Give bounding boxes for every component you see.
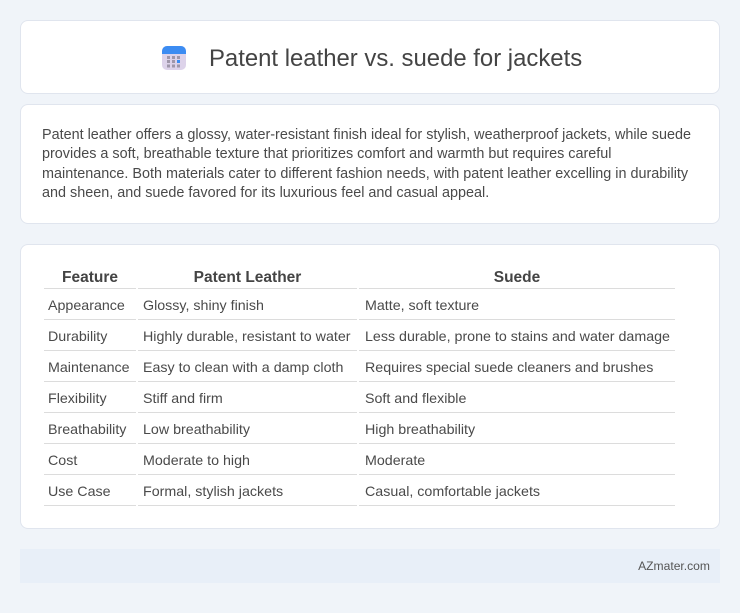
table: Moderate to high: [143, 453, 250, 469]
table: Less durable, prone to stains and water damage: [365, 329, 670, 345]
table: Suede: [494, 269, 540, 286]
table: Maintenance: [48, 360, 130, 376]
table: Cost: [48, 453, 77, 469]
icon: calendar: [162, 46, 186, 70]
heading: Patent leather vs. suede for jackets: [209, 45, 582, 72]
text block: maintenance. Both materials cater to different fashion needs, with patent leather excelling in durability: [42, 166, 688, 182]
table: Patent Leather: [194, 269, 301, 286]
table: Formal, stylish jackets: [143, 484, 283, 500]
footer credit: AZmater.com: [638, 559, 710, 573]
table: Casual, comfortable jackets: [365, 484, 540, 500]
table: Matte, soft texture: [365, 298, 479, 314]
panel: title: [20, 20, 720, 94]
table: Soft and flexible: [365, 391, 466, 407]
table: Durability: [48, 329, 107, 345]
table: [44, 269, 675, 506]
table: Low breathability: [143, 422, 250, 438]
table: Flexibility: [48, 391, 107, 407]
table: Stiff and firm: [143, 391, 223, 407]
table: Requires special suede cleaners and brushes: [365, 360, 653, 376]
table: Feature: [62, 269, 118, 286]
text block: Patent leather offers a glossy, water-resistant finish ideal for stylish, weatherproof jackets, while suede: [42, 127, 691, 143]
table: Glossy, shiny finish: [143, 298, 264, 314]
table: Highly durable, resistant to water: [143, 329, 351, 345]
table: Appearance: [48, 298, 125, 314]
text block: provides a soft, breathable texture that prioritizes comfort and warmth but requires careful: [42, 146, 612, 162]
table: Moderate: [365, 453, 425, 469]
panel: comparison table: [20, 244, 720, 529]
footer bar: [20, 549, 720, 583]
table: High breathability: [365, 422, 475, 438]
table: Use Case: [48, 484, 111, 500]
table: Breathability: [48, 422, 126, 438]
text block: [42, 127, 691, 201]
table: Easy to clean with a damp cloth: [143, 360, 343, 376]
panel: intro text: [20, 104, 720, 224]
text block: and sheen, and suede favored for its luxurious feel and casual appeal.: [42, 185, 489, 201]
